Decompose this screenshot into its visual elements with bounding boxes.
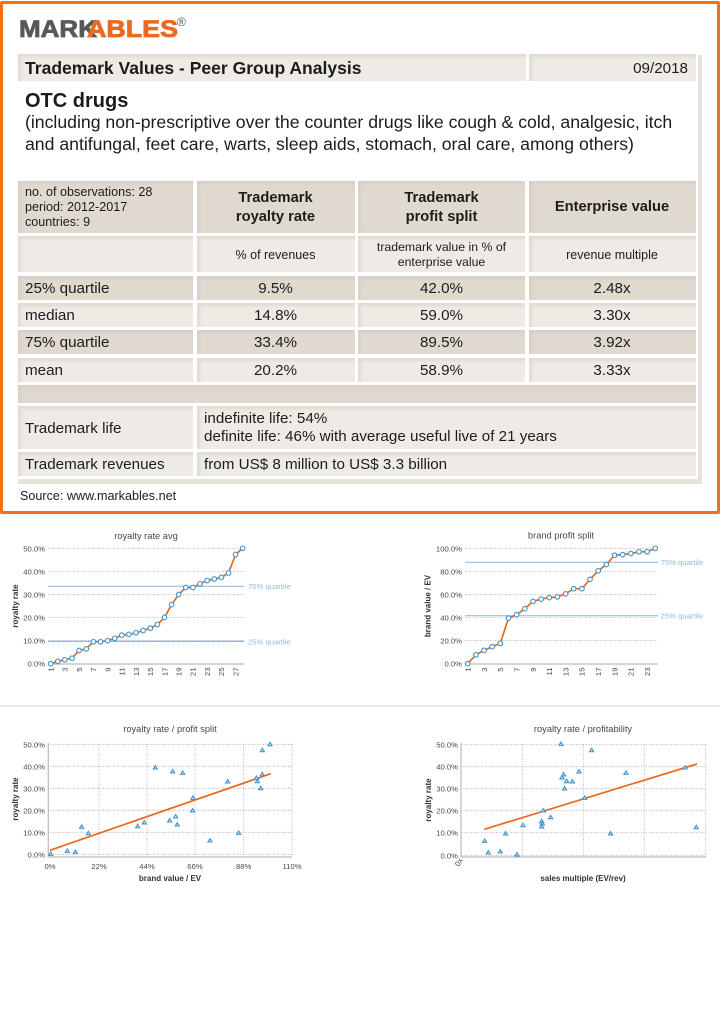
- value: trademark life: definite life: 46% with average useful live of 21 years: [204, 428, 557, 445]
- chart: royalty rate avg: royalty rate: [11, 584, 20, 628]
- chart: brand profit split: 100.0%: [436, 544, 462, 553]
- value: trademark life: [196, 406, 696, 449]
- row: mean: 3.33x: [593, 362, 631, 378]
- chart: brand profit split: 5: [496, 668, 505, 672]
- chart: brand profit split: brand profit split: [528, 530, 594, 540]
- label: trademark life: Trademark life: [25, 420, 122, 436]
- chart: royalty rate / profitability: 0x: [453, 856, 465, 868]
- unit: profit split: [358, 236, 525, 272]
- row: mean: 20.2%: [254, 362, 297, 378]
- chart: royalty rate avg: 25% quartile: [248, 638, 291, 646]
- unit: royalty rate: [196, 236, 354, 272]
- chart: royalty rate / profitability: sales multiple (EV/rev): [540, 874, 626, 883]
- row: median: median: [25, 307, 75, 324]
- logo: [19, 15, 186, 43]
- chart: royalty rate / profitability: royalty rate: [424, 778, 433, 822]
- row: mean: 58.9%: [420, 362, 463, 378]
- chart: royalty rate avg: 15: [146, 668, 155, 676]
- chart: royalty rate avg: 30.0%: [23, 590, 45, 600]
- chart: brand profit split: 80.0%: [440, 567, 462, 576]
- chart: brand profit split: 3: [480, 668, 489, 672]
- unit: enterprise value: [528, 236, 696, 272]
- logo: MARK: [19, 16, 97, 43]
- table bottom shadow: [18, 479, 702, 484]
- chart: royalty rate / profit split: 0.0%: [27, 850, 45, 859]
- row: 25% quartile: 42.0%: [420, 280, 463, 296]
- row: 75% quartile: 75% quartile: [25, 334, 109, 351]
- row: 75% quartile: 89.5%: [420, 334, 463, 351]
- chart: brand profit split: [424, 530, 703, 676]
- chart: royalty rate avg: 9: [103, 668, 112, 672]
- chart: brand profit split: 19: [610, 668, 619, 676]
- column heading: royalty rate: [196, 181, 354, 233]
- chart: brand profit split: 21: [627, 668, 636, 676]
- column heading: profit split: profit split: [406, 208, 477, 224]
- unit: enterprise value: revenue multiple: [566, 248, 658, 262]
- row: 75% quartile: [18, 330, 696, 354]
- row: 25% quartile: 9.5%: [258, 280, 293, 296]
- chart: royalty rate / profit split: 40.0%: [23, 762, 45, 771]
- column heading: royalty rate: royalty rate: [236, 208, 315, 224]
- chart: royalty rate / profit split: 66%: [187, 862, 203, 871]
- chart: royalty rate / profitability: 20.0%: [436, 807, 458, 816]
- chart: brand profit split: 20.0%: [440, 637, 462, 646]
- row: median: 14.8%: [254, 307, 297, 324]
- chart: royalty rate / profitability: 0.0%: [440, 851, 458, 860]
- chart: royalty rate avg: 10.0%: [23, 637, 45, 646]
- category description: and antifungal, feet care, warts, sleep aids, stomach, oral care, among others): [25, 134, 634, 154]
- row: median: 59.0%: [420, 307, 463, 324]
- chart: royalty rate avg: 3: [61, 668, 70, 672]
- blank unit cell: [18, 236, 193, 272]
- chart: royalty rate avg: 17: [160, 668, 169, 676]
- chart: royalty rate avg: 20.0%: [23, 614, 45, 622]
- chart: royalty rate avg: 40.0%: [23, 567, 45, 576]
- row: mean: [18, 358, 696, 382]
- chart: royalty rate / profit split: 20.0%: [23, 806, 45, 815]
- value: trademark revenues: [196, 452, 696, 476]
- chart: brand profit split: 17: [594, 668, 603, 676]
- row: median: 3.30x: [593, 307, 631, 324]
- sample information: [18, 181, 193, 233]
- label: trademark revenues: [18, 452, 193, 476]
- heading: category: OTC drugs: [25, 90, 128, 112]
- chart: royalty rate avg: royalty rate avg: [114, 531, 178, 541]
- heading: report title: [18, 54, 526, 81]
- chart: brand profit split: 11: [545, 668, 554, 675]
- logo: ABLES: [87, 16, 178, 43]
- chart: royalty rate / profit split: brand value / EV: [139, 874, 202, 883]
- chart: royalty rate / profitability: [424, 724, 706, 883]
- column heading: royalty rate: Trademark: [238, 190, 313, 206]
- chart: royalty rate / profitability: 50.0%: [436, 741, 458, 750]
- chart: brand profit split: 13: [561, 668, 570, 676]
- chart: royalty rate / profit split: 0%: [44, 862, 56, 871]
- chart: royalty rate / profit split: 30.0%: [23, 784, 45, 793]
- chart: royalty rate / profit split: royalty rate: [11, 777, 20, 821]
- chart: royalty rate avg: 19: [174, 668, 184, 676]
- chart: royalty rate / profit split: 44%: [139, 862, 155, 871]
- column heading: enterprise value: [528, 181, 696, 233]
- unit: profit split: enterprise value: [398, 254, 485, 268]
- chart: royalty rate / profitability: 30.0%: [436, 785, 458, 794]
- chart: royalty rate / profit split: 110%: [282, 862, 302, 871]
- chart: royalty rate / profit split: 10.0%: [23, 828, 45, 837]
- chart: brand profit split: 23: [643, 668, 652, 676]
- chart: royalty rate avg: 75% quartile: [248, 582, 291, 591]
- row: 25% quartile: 25% quartile: [25, 280, 109, 296]
- spacer row: [18, 385, 696, 403]
- category description: (including non-prescriptive over the counter drugs like cough & cold, analgesic, itch: [25, 112, 672, 132]
- row: median: [18, 303, 696, 327]
- chart: brand profit split: 15: [578, 668, 587, 676]
- unit: profit split: trademark value in % of: [377, 240, 506, 254]
- chart: royalty rate avg: [11, 531, 291, 676]
- sample information: period: 2012-2017: [25, 200, 127, 214]
- label: trademark revenues: Trademark revenues: [25, 456, 165, 473]
- chart: royalty rate avg: 13: [132, 668, 141, 676]
- date: [528, 54, 696, 81]
- value: trademark life: indefinite life: 54%: [204, 410, 327, 426]
- chart: royalty rate / profitability: royalty rate / profitability: [534, 724, 632, 734]
- unit: royalty rate: % of revenues: [236, 248, 315, 262]
- chart: royalty rate / profit split: 88%: [236, 862, 252, 871]
- chart: royalty rate avg: 5: [75, 668, 84, 672]
- sample information: countries: 9: [25, 214, 90, 228]
- chart: royalty rate avg: 1: [46, 668, 56, 672]
- chart: royalty rate avg: 27: [231, 668, 240, 676]
- row: 75% quartile: 3.92x: [593, 334, 631, 351]
- value: trademark revenues: from US$ 8 million to US$ 3.3 billion: [204, 456, 447, 473]
- column heading: profit split: Trademark: [404, 190, 479, 206]
- row: 25% quartile: 2.48x: [593, 280, 631, 296]
- chart: royalty rate avg: 25: [217, 668, 226, 676]
- chart: royalty rate avg: 50.0%: [23, 544, 45, 553]
- chart: brand profit split: 1: [464, 668, 472, 672]
- chart: brand profit split: 75% quartile: [660, 558, 703, 567]
- chart: brand profit split: 60.0%: [440, 590, 462, 600]
- chart: royalty rate / profitability: 10.0%: [436, 829, 458, 838]
- label: trademark life: [18, 406, 193, 449]
- chart: brand profit split: brand value / EV: [424, 574, 432, 637]
- chart: royalty rate / profit split: 22%: [91, 862, 107, 871]
- chart: royalty rate avg: 23: [203, 668, 212, 676]
- column heading: enterprise value: Enterprise value: [555, 199, 669, 215]
- heading: report title: Trademark Values - Peer Group Analysis: [25, 58, 362, 78]
- source: Source: www.markables.net: [20, 489, 176, 503]
- date: 09/2018: [633, 60, 688, 76]
- chart: brand profit split: 7: [512, 668, 521, 672]
- divider between chart rows: [0, 705, 720, 707]
- category description: [25, 112, 672, 154]
- chart: royalty rate / profit split: [11, 724, 302, 883]
- chart: royalty rate / profit split: royalty rate / profit split: [123, 724, 217, 734]
- row: 75% quartile: 33.4%: [254, 334, 297, 351]
- chart: brand profit split: 25% quartile: [660, 612, 703, 620]
- chart: royalty rate avg: 7: [89, 668, 98, 672]
- panel shadow: [698, 55, 702, 484]
- chart: royalty rate avg: 0.0%: [27, 660, 45, 669]
- panel: summary table frame: [0, 1, 720, 514]
- chart: royalty rate avg: 11: [118, 668, 127, 675]
- chart: brand profit split: 0.0%: [444, 660, 462, 669]
- logo: ®: [177, 15, 186, 29]
- sample information: no. of observations: 28: [25, 184, 152, 198]
- chart: brand profit split: 9: [529, 668, 538, 672]
- chart: royalty rate / profit split: 50.0%: [23, 740, 45, 749]
- column heading: profit split: [358, 181, 525, 233]
- chart: royalty rate / profitability: 40.0%: [436, 763, 458, 772]
- row: mean: mean: [25, 362, 63, 378]
- row: 25% quartile: [18, 276, 696, 300]
- chart: royalty rate avg: 21: [189, 668, 198, 676]
- chart: brand profit split: 40.0%: [440, 614, 462, 622]
